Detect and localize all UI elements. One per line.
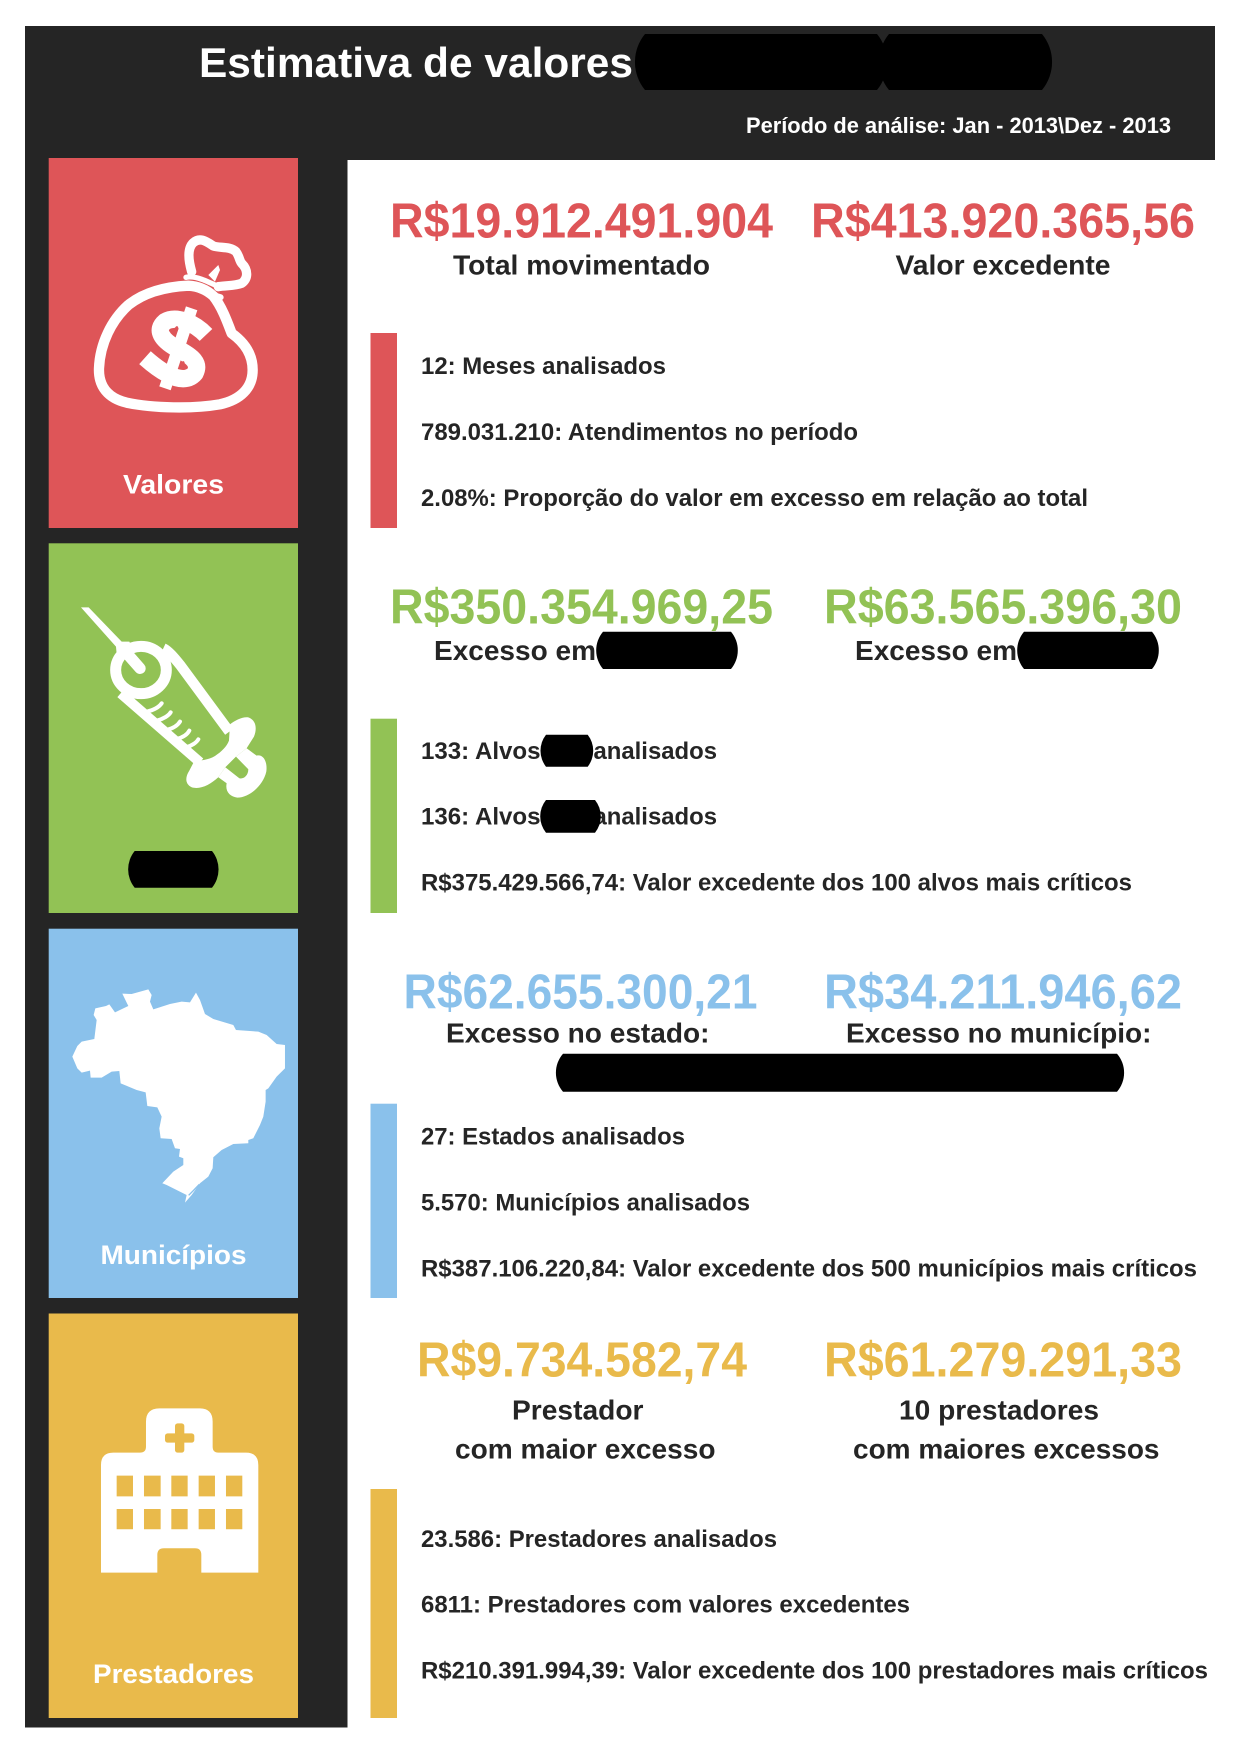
title: Estimativa de valores xyxy=(199,39,633,86)
list: municípios: R$387.106.220,84: Valor excedente dos 500 municípios mais críticos xyxy=(421,1255,1197,1282)
list: alvos: R$375.429.566,74: Valor excedente dos 100 alvos mais críticos xyxy=(421,870,1132,896)
stat: excesso left xyxy=(390,580,773,669)
stat: 10 prestadores xyxy=(824,1334,1182,1464)
stat: excesso no estado: Excesso no estado: xyxy=(446,1018,710,1049)
list: municípios: 27: Estados analisados xyxy=(421,1124,685,1150)
stat: total movimentado: Total movimentado xyxy=(453,249,710,280)
stat: excesso no município: R$34.211.946,62 xyxy=(824,965,1182,1019)
list: alvos: analisados xyxy=(594,738,717,765)
stat: excesso right: R$63.565.396,30 xyxy=(824,580,1182,634)
icon: map of Brazil xyxy=(72,989,285,1203)
panel: valores xyxy=(49,158,298,528)
stat: excesso right: Excesso em xyxy=(855,635,1017,666)
stat: valor excedente xyxy=(811,194,1195,280)
accent bar: yellow xyxy=(370,1489,397,1718)
panel: prestadores xyxy=(49,1314,298,1718)
label: prestadores: Prestadores xyxy=(93,1659,254,1689)
label: valores: Valores xyxy=(123,470,224,500)
section: municípios stats xyxy=(370,965,1197,1298)
header xyxy=(199,34,1171,138)
stat: excesso left: R$350.354.969,25 xyxy=(390,580,773,634)
list: valores xyxy=(421,353,1088,512)
stat: excesso no município: Excesso no município: xyxy=(846,1018,1152,1049)
stat: valor excedente: Valor excedente xyxy=(896,249,1110,280)
stat: 10 prestadores: 10 prestadores xyxy=(899,1394,1099,1425)
stat: total movimentado xyxy=(390,194,773,280)
list: prestadores: 23.586: Prestadores analisados xyxy=(421,1526,777,1553)
list: prestadores xyxy=(421,1526,1208,1684)
icon: hospital xyxy=(101,1408,258,1573)
list: municípios: 5.570: Municípios analisados xyxy=(421,1190,750,1216)
stat: 10 prestadores: R$61.279.291,33 xyxy=(824,1334,1182,1388)
stat: prestador com maior excesso: Prestador xyxy=(512,1394,644,1425)
list: alvos: 133: Alvos xyxy=(421,738,540,765)
panel: municípios xyxy=(49,929,298,1298)
panel: alvos (green) xyxy=(49,543,298,913)
accent bar: blue xyxy=(370,1104,397,1298)
list: alvos: 136: Alvos xyxy=(421,804,540,831)
stat: excesso no município xyxy=(824,965,1182,1049)
stat: total movimentado: R$19.912.491.904 xyxy=(390,194,773,248)
stat: excesso no estado xyxy=(404,965,758,1049)
stat: 10 prestadores: com maiores excessos xyxy=(853,1433,1160,1464)
stat: excesso left: Excesso em xyxy=(434,635,596,666)
stat: valor excedente: R$413.920.365,56 xyxy=(811,194,1195,248)
list: alvos: analisados xyxy=(594,804,717,831)
redaction: locations xyxy=(556,1054,1124,1092)
list: prestadores: 6811: Prestadores com valores excedentes xyxy=(421,1592,910,1619)
list: valores: 789.031.210: Atendimentos no período xyxy=(421,419,858,446)
accent bar: red xyxy=(370,333,397,528)
icon: money bag xyxy=(99,240,253,407)
stat: excesso right xyxy=(824,580,1182,669)
list: prestadores: R$210.391.994,39: Valor excedente dos 100 prestadores mais críticos xyxy=(421,1657,1208,1684)
accent bar: green xyxy=(370,719,397,913)
stat: excesso no estado: R$62.655.300,21 xyxy=(404,965,758,1019)
redaction: panel label xyxy=(128,851,219,888)
list: valores: 12: Meses analisados xyxy=(421,353,666,380)
stat: prestador com maior excesso: R$9.734.582,74 xyxy=(417,1334,747,1388)
redaction: title xyxy=(635,34,1052,90)
list: valores: 2.08%: Proporção do valor em excesso em relação ao total xyxy=(421,485,1088,512)
stat: prestador com maior excesso xyxy=(417,1334,747,1464)
section: valores stats xyxy=(370,194,1195,528)
analysis period: Período de análise: Jan - 2013\Dez - 2013 xyxy=(746,113,1171,138)
icon: syringe xyxy=(81,607,267,798)
section: prestadores stats xyxy=(370,1334,1208,1718)
list: municípios xyxy=(421,1124,1197,1282)
list: alvos xyxy=(421,735,1132,896)
section: alvos stats xyxy=(370,580,1182,913)
stat: prestador com maior excesso: com maior excesso xyxy=(455,1433,716,1464)
label: municípios: Municípios xyxy=(100,1240,246,1270)
